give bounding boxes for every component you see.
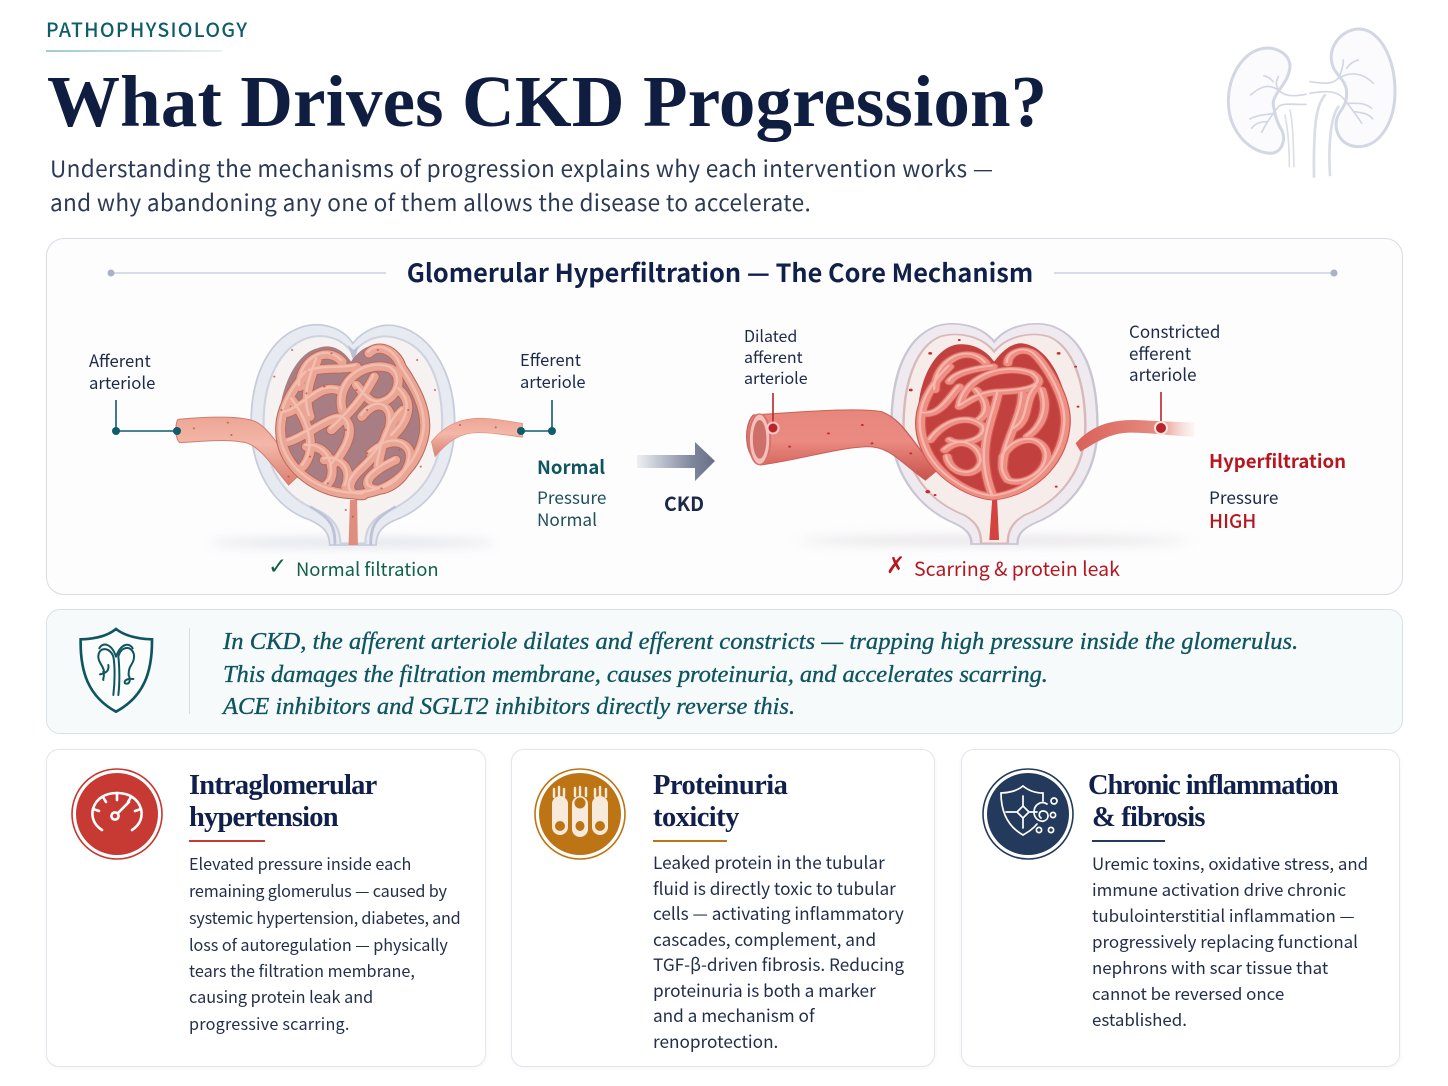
callout text: ACE inhibitors and SGLT2 inhibitors directly reverse this. — [223, 693, 795, 720]
callout: afferent arteriole: Afferent — [89, 348, 151, 372]
body text: established. — [1092, 1006, 1187, 1031]
heading: Proteinuria — [653, 770, 787, 801]
illustration: normal glomerulus — [175, 324, 523, 550]
subtitle: Understanding the mechanisms of progression explains why each intervention works — — [50, 151, 993, 184]
callout: constricted efferent arteriole — [1129, 318, 1220, 435]
card: chronic inflammation and fibrosis — [961, 749, 1400, 1067]
callout: constricted efferent arteriole: arteriole — [1129, 361, 1197, 386]
capsule — [891, 324, 1097, 544]
callout: afferent arteriole: arteriole — [89, 370, 155, 394]
illustration: CKD glomerulus — [746, 323, 1194, 548]
dilated afferent arteriole — [747, 410, 937, 480]
status: normal: Normal — [537, 506, 597, 531]
arrow: normal to CKD — [637, 442, 715, 517]
caption: scarring and protein leak: ✗ — [886, 553, 905, 579]
body text: systemic hypertension, diabetes, and — [189, 905, 460, 929]
status: normal: Pressure — [537, 484, 606, 509]
body text: cannot be reversed once — [1092, 980, 1284, 1005]
status: normal: Normal — [537, 454, 605, 480]
panel heading: Glomerular Hyperfiltration — The Core Mechanism — [407, 254, 1033, 290]
callout text: In CKD, the afferent arteriole dilates and efferent constricts — trapping high pressure inside the glomerulus. — [223, 628, 1298, 655]
body text: immune activation drive chronic — [1092, 876, 1346, 901]
body text: fluid is directly toxic to tubular — [653, 875, 896, 900]
capsule — [251, 325, 455, 545]
efferent arteriole — [431, 418, 522, 457]
arrow: normal to CKD: CKD — [664, 488, 704, 517]
caption: scarring and protein leak: Scarring & protein leak — [914, 553, 1120, 582]
callout text — [222, 628, 1298, 720]
icon: tubular cells — [534, 768, 626, 860]
body text: Uremic toxins, oxidative stress, and — [1092, 850, 1368, 875]
caption: normal filtration: Normal filtration — [296, 556, 439, 582]
body text: progressive scarring. — [189, 1011, 350, 1035]
callout: efferent arteriole: arteriole — [520, 369, 586, 393]
heading: Chronic inflammation — [1088, 770, 1338, 801]
status: hyperfiltration: HIGH — [1209, 507, 1256, 534]
body text: causing protein leak and — [189, 984, 373, 1008]
heading: hypertension — [189, 802, 338, 833]
heading — [1088, 770, 1338, 842]
callout: efferent arteriole — [517, 347, 586, 435]
heading: toxicity — [653, 802, 739, 833]
title: What Drives CKD Progression? — [47, 61, 1047, 142]
body text: tubulointerstitial inflammation — — [1092, 902, 1355, 927]
callout text: This damages the filtration membrane, causes proteinuria, and accelerates scarring. — [223, 661, 1048, 688]
caption: normal filtration: ✓ — [268, 554, 287, 580]
body text: renoprotection. — [653, 1028, 778, 1053]
panel heading — [108, 254, 1338, 290]
body text — [653, 849, 904, 1053]
body text: Leaked protein in the tubular — [653, 849, 885, 874]
heading: & fibrosis — [1092, 802, 1205, 833]
heading: Intraglomerular — [189, 770, 376, 801]
body text: cascades, complement, and — [653, 926, 876, 951]
status: normal — [537, 454, 606, 531]
body text: nephrons with scar tissue that — [1092, 954, 1328, 979]
status: hyperfiltration: Hyperfiltration — [1209, 447, 1346, 474]
tuft — [918, 343, 1068, 499]
constricted efferent arteriole — [1076, 420, 1194, 452]
callout: dilated afferent arteriole: arteriole — [744, 365, 808, 389]
body text: Elevated pressure inside each — [189, 851, 411, 875]
callout: dilated afferent arteriole: afferent — [744, 344, 803, 368]
body text: cells — activating inflammatory — [653, 900, 904, 925]
callout: afferent arteriole — [89, 348, 181, 435]
divider — [189, 628, 190, 714]
body text: TGF-β-driven fibrosis. Reducing — [653, 951, 904, 976]
body text: progressively replacing functional — [1092, 928, 1358, 953]
heading — [189, 770, 377, 842]
body text — [189, 851, 460, 1035]
card: intraglomerular hypertension — [46, 749, 486, 1067]
icon: kidneys — [1226, 28, 1396, 178]
body text: proteinuria is both a marker — [653, 977, 876, 1002]
callout: constricted efferent arteriole: efferent — [1129, 340, 1191, 365]
panel: glomerular hyperfiltration — [46, 238, 1403, 595]
eyebrow: pathophysiology: PATHOPHYSIOLOGY — [46, 14, 248, 43]
afferent arteriole — [176, 417, 298, 485]
body text: loss of autoregulation — physically — [189, 932, 448, 956]
icon: gauge — [71, 768, 163, 860]
callout: constricted efferent arteriole: Constricted — [1129, 318, 1220, 343]
callout: dilated afferent arteriole: Dilated — [744, 323, 797, 347]
body text — [1092, 850, 1368, 1031]
icon: shield with inflammation — [982, 768, 1074, 860]
body text: tears the filtration membrane, — [189, 958, 415, 982]
icon: shield with nephron — [79, 627, 154, 714]
subtitle: and why abandoning any one of them allows the disease to accelerate. — [50, 185, 811, 218]
panel: explanation callout — [46, 609, 1403, 734]
status: hyperfiltration: Pressure — [1209, 484, 1278, 509]
status: hyperfiltration — [1209, 447, 1346, 534]
callout: efferent arteriole: Efferent — [520, 347, 581, 371]
tuft — [279, 346, 428, 498]
body text: remaining glomerulus — caused by — [189, 878, 447, 902]
card: proteinuria toxicity — [511, 749, 935, 1067]
body text: and a mechanism of — [653, 1002, 815, 1027]
subtitle — [50, 151, 993, 218]
heading — [653, 770, 788, 842]
callout: dilated afferent arteriole — [744, 323, 808, 434]
